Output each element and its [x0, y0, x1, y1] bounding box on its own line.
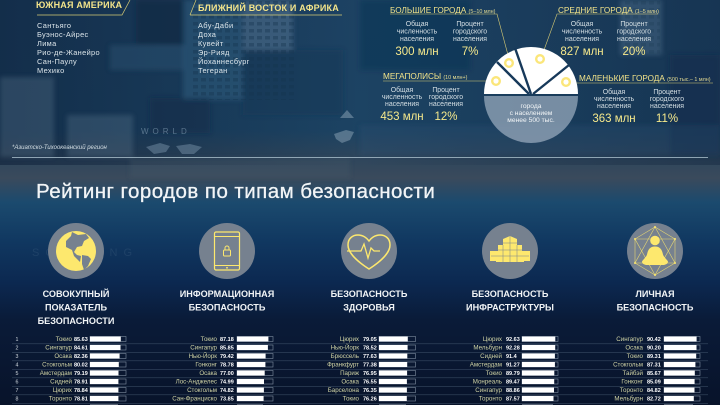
- panel: large cities: населения: [453, 36, 487, 43]
- icon: buildings: [482, 223, 538, 279]
- ranking: overall safety: 78.91: [74, 380, 88, 386]
- ranking: infrastructure security: 92.28: [506, 346, 520, 352]
- ranking: infrastructure security: 89.79: [506, 371, 520, 377]
- ranking: infrastructure security: 89.47: [506, 380, 520, 386]
- ranking: health security: 76.26: [363, 396, 377, 402]
- panel: megacities: 453 млн: [380, 111, 424, 123]
- heading: Middle East and Africa: БЛИЖНИЙ ВОСТОК И АФРИКА: [198, 2, 339, 13]
- background: WORLD: [141, 127, 191, 136]
- city list: South America: Сантьяго: [37, 21, 71, 30]
- panel: small cities: Общая: [603, 88, 626, 96]
- ranking: personal security: 85.67: [647, 371, 661, 377]
- ranking: health security: 76.95: [363, 371, 377, 377]
- ranking: infrastructure security: 88.86: [506, 388, 520, 394]
- ranking: personal security: 90.42: [647, 337, 661, 343]
- panel: small cities: 363 млн: [592, 113, 636, 125]
- ranking: information security: 85.85: [220, 346, 234, 352]
- ranking: overall safety: 78.81: [74, 396, 88, 402]
- city list: South America: Мехико: [37, 66, 65, 75]
- city list: Middle East and Africa: Кувейт: [198, 39, 224, 48]
- panel: large cities: [390, 6, 496, 58]
- ranking: personal security: Торонто: [620, 387, 644, 394]
- ranking: personal security: Токио: [627, 353, 644, 360]
- panel: megacities: 12%: [434, 111, 458, 123]
- panel: megacities: МЕГАПОЛИСЫ (10 млн+): [383, 72, 468, 81]
- city list: South America: Лима: [37, 39, 57, 48]
- ranking: health security: Цюрих: [340, 336, 360, 343]
- city list: Middle East and Africa: Тегеран: [198, 66, 228, 75]
- ranking: information security: 78.78: [220, 362, 234, 368]
- ranking: health security: Осака: [341, 378, 360, 386]
- ranking: personal security: Гонконг: [621, 378, 644, 386]
- city list: Middle East and Africa: Абу-Даби: [198, 21, 233, 30]
- column: health security: [331, 223, 408, 312]
- panel: medium cities: 827 млн: [560, 46, 604, 58]
- panel: small cities: МАЛЕНЬКИЕ ГОРОДА (500 тыс.– 1 млн): [579, 74, 711, 83]
- city list: Middle East and Africa: Йоханнесбург: [198, 57, 250, 66]
- label: health security: БЕЗОПАСНОСТЬ: [331, 289, 408, 299]
- panel: megacities: городского: [429, 94, 463, 101]
- panel: small cities: населения: [650, 103, 684, 110]
- panel: large cities: Процент: [456, 21, 484, 28]
- ranking: personal security: Сингапур: [616, 336, 644, 343]
- ranking: infrastructure security: Токио: [486, 370, 503, 377]
- panel: medium cities: населения: [617, 36, 651, 43]
- panel: large cities: численность: [397, 28, 438, 36]
- leader lines: [383, 14, 713, 83]
- ranking: information security: 79.42: [220, 354, 234, 360]
- panel: small cities: Процент: [653, 89, 681, 96]
- icon: meditating figure: [627, 223, 683, 279]
- ranking: information security: 77.00: [220, 371, 234, 377]
- ranking: overall safety: 80.02: [74, 362, 88, 368]
- ranking: health security: 77.63: [363, 354, 377, 360]
- ranking: infrastructure security: Амстердам: [470, 362, 502, 368]
- panel: megacities: численность: [382, 94, 423, 101]
- panel: large cities: Общая: [406, 20, 429, 28]
- panel: megacities: населения: [385, 101, 419, 108]
- rank numbers: 4: [16, 362, 19, 368]
- panel: medium cities: численность: [562, 28, 603, 36]
- ranking: infrastructure security: 91.27: [506, 362, 520, 368]
- label: information security: ИНФОРМАЦИОННАЯ: [180, 289, 274, 299]
- column: information security: [180, 223, 274, 312]
- ranking: personal security: Мельбурн: [614, 396, 643, 402]
- panel: megacities: Процент: [432, 87, 460, 94]
- ranking: overall safety: Торонто: [49, 396, 73, 402]
- ranking: information security: Осака: [199, 370, 218, 377]
- footnote: *Азиатско-Тихоокеанский регион: [12, 144, 108, 151]
- pie chart: city share: с населением: [510, 110, 553, 117]
- ranking: infrastructure security: Сидней: [480, 353, 503, 360]
- panel: medium cities: СРЕДНИЕ ГОРОДА (1–5 млн): [558, 6, 659, 15]
- ranking: overall safety: 79.19: [74, 371, 88, 377]
- icon: heart with pulse: [341, 223, 397, 279]
- panel: large cities: городского: [453, 28, 487, 36]
- ranking: infrastructure security: 87.57: [506, 396, 520, 402]
- city list: South America: Рио-де-Жанейро: [37, 48, 100, 57]
- ranking: overall safety: 82.36: [74, 354, 88, 360]
- ranking: infrastructure security: Мельбурн: [473, 344, 502, 352]
- panel: medium cities: городского: [617, 28, 651, 36]
- table row dividers: [12, 344, 708, 404]
- ranking: infrastructure security: 91.4: [506, 354, 518, 360]
- rank numbers: 2: [16, 346, 19, 352]
- ranking: overall safety: Сидней: [50, 378, 73, 386]
- ranking: personal security: 90.20: [647, 346, 661, 352]
- label: information security: БЕЗОПАСНОСТЬ: [189, 302, 266, 312]
- label: overall safety: ПОКАЗАТЕЛЬ: [45, 302, 108, 312]
- ranking: health security: 76.35: [363, 388, 377, 394]
- ranking: overall safety: 84.61: [74, 346, 88, 352]
- ranking: information security: 87.18: [220, 337, 234, 343]
- ranking: health security: [327, 336, 416, 405]
- pie chart: city share: [484, 47, 578, 143]
- ranking: personal security: Осака: [625, 344, 644, 352]
- panel: megacities: населения: [429, 101, 463, 108]
- ranking: personal security: 87.31: [647, 362, 661, 368]
- panel: large cities: населения: [400, 36, 434, 43]
- ranking: personal security: 89.31: [647, 354, 661, 360]
- panel: small cities: городского: [650, 96, 684, 103]
- panel: megacities: [380, 72, 468, 123]
- heading: South America: ЮЖНАЯ АМЕРИКА: [36, 0, 123, 10]
- column: overall safety: [38, 223, 114, 326]
- ranking: overall safety: Токио: [56, 336, 73, 343]
- ranking: personal security: Тайбэй: [622, 370, 644, 377]
- ranking: personal security: Стокгольм: [613, 362, 643, 368]
- ranking: information security: Сан-Франциско: [172, 396, 218, 402]
- label: personal security: ЛИЧНАЯ: [636, 289, 674, 299]
- ranking: overall safety: Сингапур: [45, 344, 73, 352]
- ranking: personal security: [613, 336, 700, 405]
- ranking: information security: 74.82: [220, 388, 234, 394]
- ranking: infrastructure security: Монреаль: [473, 378, 502, 386]
- panel: medium cities: Общая: [571, 20, 594, 28]
- title: Рейтинг городов по типам безопасности: [36, 180, 435, 203]
- ranking: information security: Лос-Анджелес: [176, 378, 217, 386]
- ranking: overall safety: Осака: [54, 353, 73, 360]
- city list: Middle East and Africa: Эр-Рияд: [198, 48, 230, 57]
- panel: small cities: [579, 74, 711, 125]
- ranking: infrastructure security: Цюрих: [483, 336, 503, 343]
- panel: large cities: БОЛЬШИЕ ГОРОДА (5–10 млн): [390, 6, 496, 15]
- ranking: health security: Брюссель: [331, 353, 359, 360]
- pie chart: city share: города: [521, 103, 542, 110]
- label: personal security: БЕЗОПАСНОСТЬ: [617, 302, 694, 312]
- rank numbers: 3: [16, 354, 19, 360]
- ranking: information security: Токио: [201, 336, 218, 343]
- ranking: personal security: 82.72: [647, 396, 661, 402]
- rank numbers: 7: [16, 388, 19, 394]
- panel: small cities: населения: [597, 103, 631, 110]
- pie chart: city share: менее 500 тыс.: [507, 117, 555, 124]
- ranking: health security: 79.05: [363, 337, 377, 343]
- ranking: infrastructure security: Сингапур: [475, 387, 503, 394]
- ranking: information security: Гонконг: [195, 362, 218, 368]
- ranking: personal security: 84.82: [647, 388, 661, 394]
- ranking: overall safety: 85.63: [74, 337, 88, 343]
- ranking: information security: Нью-Йорк: [189, 352, 217, 360]
- ranking: overall safety: 78.84: [74, 388, 89, 394]
- label: overall safety: СОВОКУПНЫЙ: [43, 288, 109, 299]
- panel: medium cities: населения: [565, 36, 599, 43]
- ranking: information security: 73.85: [220, 396, 234, 402]
- rank numbers: [16, 337, 19, 402]
- panel: Middle East and Africa: [190, 0, 342, 75]
- label: infrastructure security: БЕЗОПАСНОСТЬ: [472, 289, 549, 299]
- label: health security: ЗДОРОВЬЯ: [343, 302, 395, 312]
- ranking: information security: Стокгольм: [187, 387, 217, 394]
- rank numbers: 5: [16, 371, 19, 377]
- ranking: health security: 78.52: [363, 346, 377, 352]
- ranking: health security: Токио: [343, 396, 360, 402]
- panel: medium cities: [558, 6, 659, 58]
- panel: large cities: 7%: [462, 46, 478, 58]
- icon: tablet with lock: [199, 223, 255, 279]
- background: SCANNING: [32, 247, 138, 259]
- ranking: health security: Нью-Йорк: [331, 344, 359, 352]
- ranking: information security: Сингапур: [190, 344, 218, 352]
- rank numbers: 1: [16, 337, 19, 343]
- rank numbers: 8: [16, 396, 19, 402]
- ranking: overall safety: [40, 336, 126, 405]
- city list: South America: Сан-Паулу: [37, 57, 77, 66]
- panel: medium cities: 20%: [622, 46, 646, 58]
- ranking: infrastructure security: [470, 336, 558, 405]
- ranking: personal security: 85.09: [647, 380, 661, 386]
- ranking: information security: 74.99: [220, 380, 234, 386]
- icon: globe: [48, 223, 104, 279]
- ranking: health security: 77.38: [363, 362, 377, 368]
- column: infrastructure security: [466, 223, 554, 312]
- panel: small cities: 11%: [656, 113, 678, 125]
- city list: South America: Буэнос-Айрес: [37, 30, 89, 39]
- panel: South America: [36, 0, 130, 75]
- panel: megacities: Общая: [391, 86, 414, 94]
- ranking: overall safety: Цюрих: [53, 387, 73, 394]
- ranking: overall safety: Амстердам: [40, 370, 72, 377]
- ranking: health security: Париж: [340, 370, 360, 377]
- label: overall safety: БЕЗОПАСНОСТИ: [38, 316, 114, 326]
- ranking: health security: Франкфурт: [327, 362, 359, 368]
- panel: large cities: 300 млн: [395, 46, 439, 58]
- column: personal security: [617, 223, 694, 312]
- rank numbers: 6: [16, 380, 19, 386]
- label: infrastructure security: ИНФРАСТРУКТУРЫ: [466, 302, 554, 312]
- ranking: infrastructure security: 92.63: [506, 337, 520, 343]
- ranking: health security: 76.55: [363, 380, 377, 386]
- ranking: overall safety: Стокгольм: [42, 362, 72, 368]
- city list: Middle East and Africa: Доха: [198, 30, 217, 39]
- ranking: health security: Барселона: [328, 387, 360, 394]
- ranking: infrastructure security: Торонто: [479, 396, 503, 402]
- panel: small cities: численность: [594, 96, 635, 103]
- panel: medium cities: Процент: [620, 21, 648, 28]
- ranking: information security: [172, 336, 273, 405]
